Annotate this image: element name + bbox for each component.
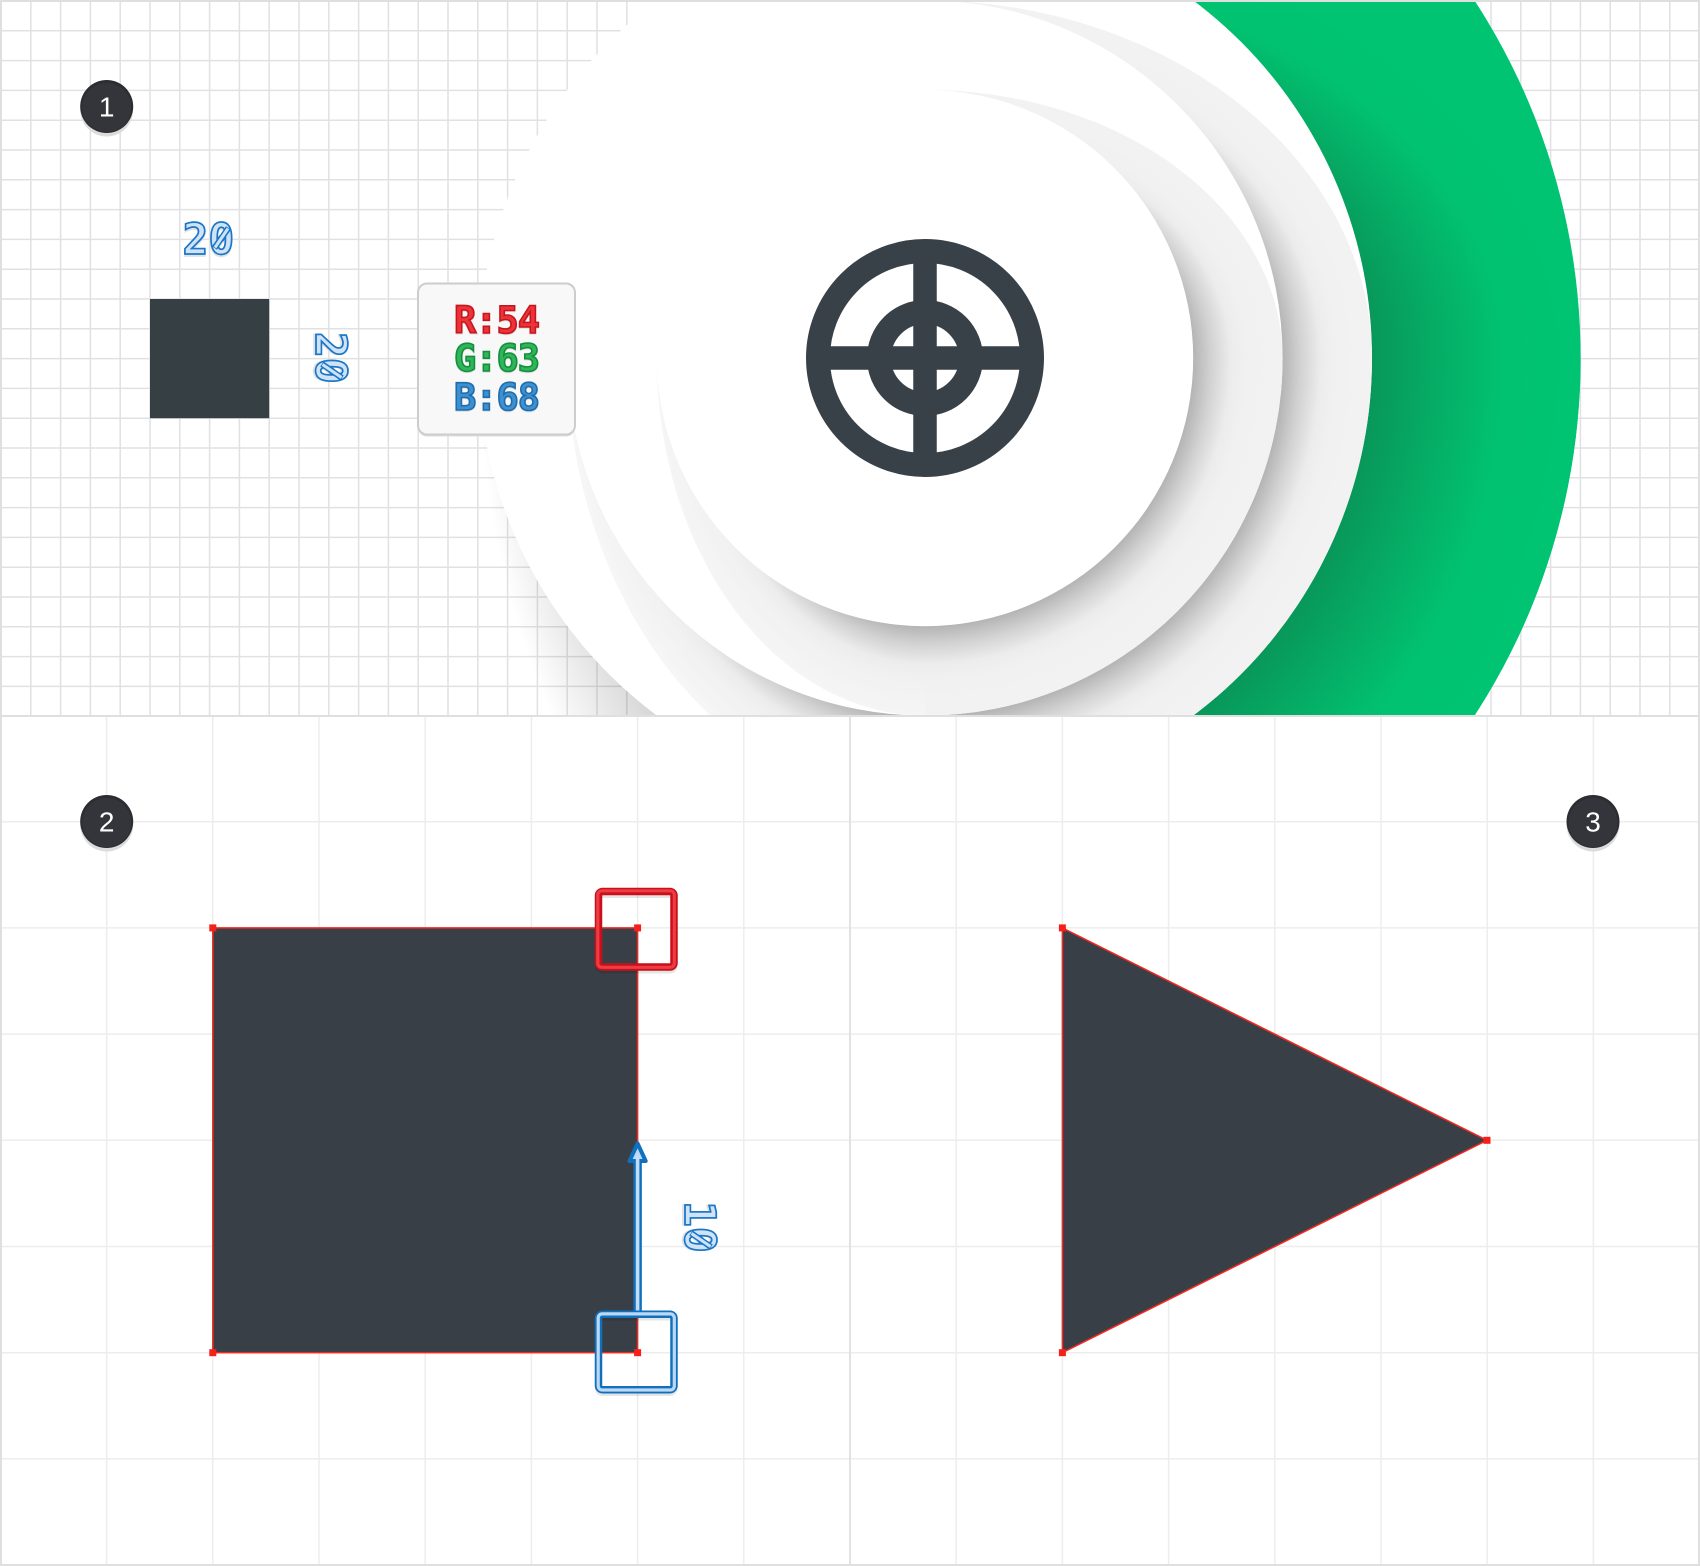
badge: step 2 <box>80 795 133 852</box>
panel: steps 2 and 3 on coarse grid <box>0 716 1700 1566</box>
highlight: red selection box on top right anchor <box>598 891 674 970</box>
badge: step 2: 2 <box>99 806 114 838</box>
white middle circle with shadow of inner circle <box>567 0 1285 718</box>
label: height 20 rotated: 20 <box>305 332 355 384</box>
badge: step 3: 3 <box>1585 806 1601 838</box>
badge: step 3 <box>1566 795 1620 852</box>
callout: RGB colour values: B:68 <box>454 376 540 419</box>
divider between step 2 and step 3 <box>849 716 851 1566</box>
callout: RGB colour values: G:63 <box>454 337 540 380</box>
label: move distance 10 rotated: 10 <box>674 1201 724 1253</box>
badge: step 1 <box>80 80 133 136</box>
triangle shape with anchor points <box>1059 924 1490 1356</box>
arrow: move anchor up 10 <box>630 1144 646 1312</box>
white outer circle with shadow of middle circle <box>486 2 1372 715</box>
green outer ring with shadow <box>478 0 1625 1014</box>
panel: step 1 circles on fine grid <box>2 2 1698 715</box>
square shape with anchor points <box>209 924 641 1356</box>
badge: step 1: 1 <box>99 92 114 122</box>
highlight: blue selection box on bottom right anchor <box>598 1314 674 1392</box>
callout: RGB colour values <box>418 284 575 436</box>
label: width 20: 20 <box>182 215 234 265</box>
icon: target crosshair <box>807 240 1043 476</box>
white inner circle <box>657 90 1193 626</box>
callout: RGB colour values: R:54 <box>454 299 540 342</box>
square: 20 by 20 dark swatch <box>150 299 269 418</box>
